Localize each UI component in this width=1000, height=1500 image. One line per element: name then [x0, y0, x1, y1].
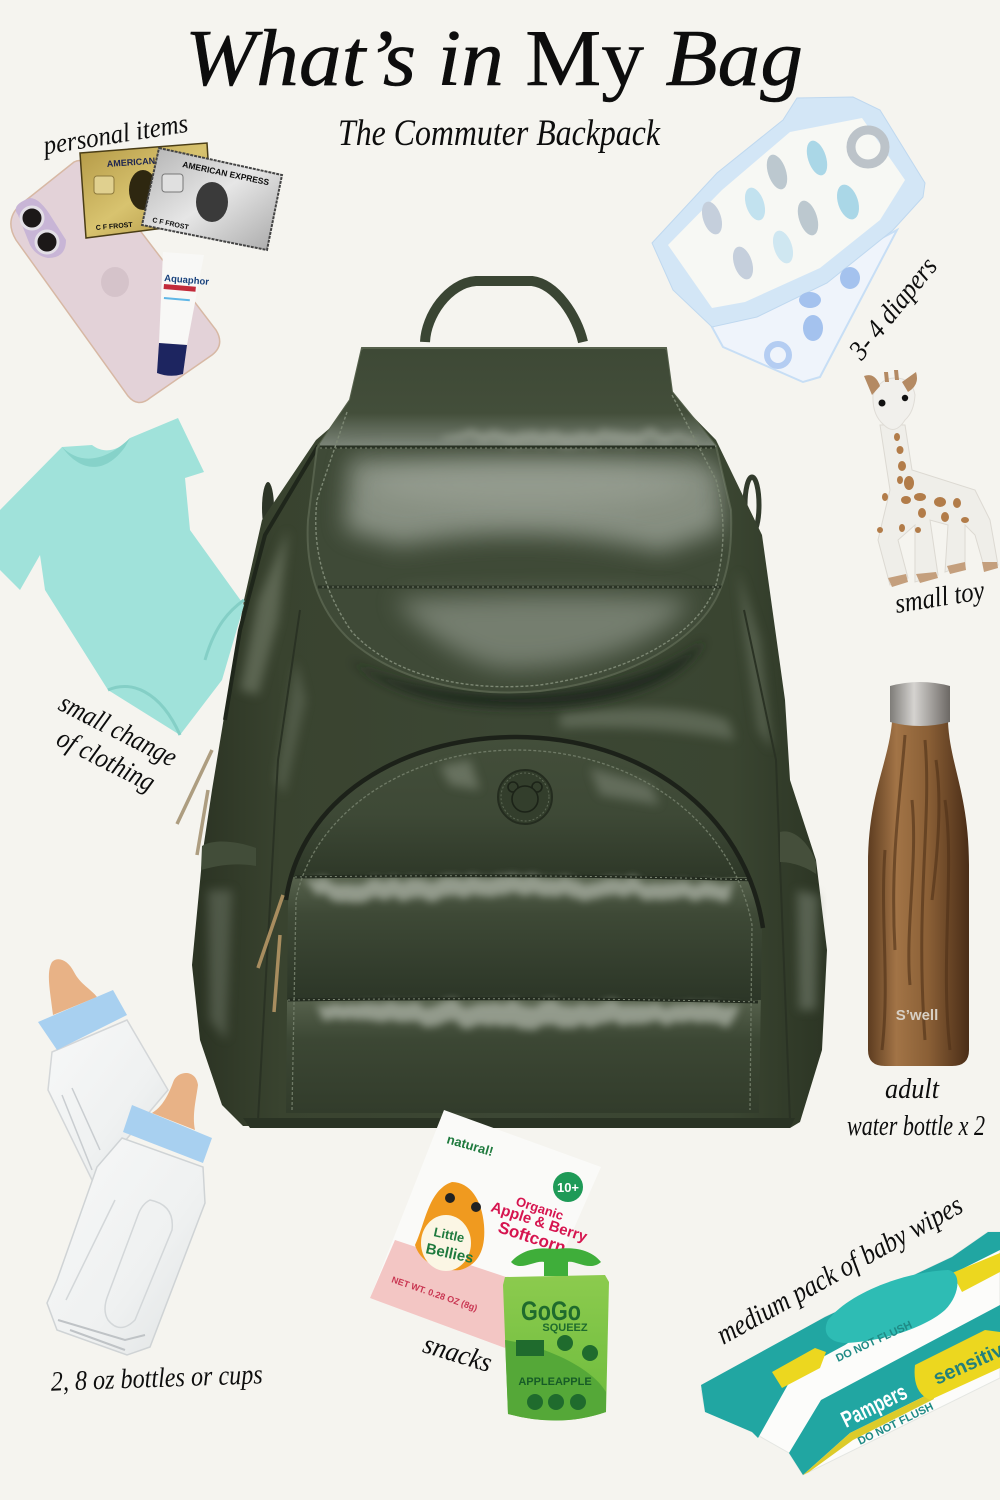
left side seam and zipper: [225, 446, 318, 720]
flap panel: [308, 348, 731, 692]
giraffe hooves: [888, 562, 998, 587]
side pocket gathers left: [201, 842, 256, 870]
toy giraffe: [864, 370, 998, 587]
flap highlights: [318, 350, 722, 668]
lower teal band: [789, 1305, 1000, 1475]
second line: of clothing: [52, 723, 160, 798]
little bellies pouch: 10+: [557, 1180, 579, 1195]
water bottle: [868, 682, 969, 1066]
yellow badges: [915, 1330, 1000, 1400]
subtitle: The Commuter Backpack: [338, 113, 660, 154]
strap ring right: [745, 477, 759, 533]
pocket arch highlights: [440, 760, 480, 790]
gold card: [80, 143, 212, 238]
baby bottles: [38, 959, 212, 1355]
bear logo patch: [498, 770, 552, 824]
title: What’s in My Bag: [185, 13, 803, 103]
silver card: AMERICAN EXPRESS: [182, 159, 270, 187]
lower prints: [767, 267, 860, 366]
label: medium pack of baby wipes: medium pack of baby wipes: [711, 1189, 968, 1351]
label: personal items: personal items: [39, 108, 190, 161]
gogo squeez pouch: GoGo: [521, 1296, 581, 1326]
zipper pull lower: [258, 895, 283, 1012]
gogo squeez pouch: APPLEAPPLE: [518, 1376, 592, 1388]
phone: [11, 161, 220, 403]
label: small toy: small toy: [893, 575, 987, 620]
label: adult water bottle x 2: [847, 1074, 985, 1142]
wood grain: [882, 735, 950, 1050]
lower diaper: [712, 230, 897, 382]
front bottle: [47, 1073, 212, 1355]
label: small change of clothing: small change: [54, 688, 182, 773]
wipes pack: [701, 1232, 1000, 1475]
flap stitching: [316, 395, 723, 687]
little bellies pouch: [370, 1110, 601, 1350]
backpack body: [192, 395, 827, 1128]
label: diapers: 3- 4 diapers: [842, 251, 944, 367]
bag bottom rim: [243, 1118, 795, 1128]
whale prints: [698, 138, 863, 282]
water bottle: S’well: [896, 1007, 938, 1024]
gold card: AMERICAN EX: [106, 155, 170, 169]
backpack illustration: [177, 281, 827, 1128]
little bellies pouch: Little: [432, 1224, 466, 1245]
giraffe head: [873, 378, 915, 429]
giraffe eyes: [878, 400, 886, 406]
yellow trim: [803, 1393, 934, 1475]
lip balm: Aquaphor: [164, 273, 210, 288]
label: 2, 8 oz bottles or cups: 2, 8 oz bottles or cups: [50, 1359, 263, 1398]
upper diaper: [652, 97, 925, 327]
snacks: [370, 1110, 609, 1421]
gogo squeez pouch: SQUEEZ: [542, 1322, 588, 1334]
side pocket gathers right: [780, 831, 816, 874]
silver card: C F FROST: [152, 217, 190, 232]
wipes: Pampers: [837, 1378, 911, 1432]
lid: [826, 1270, 957, 1343]
gold card: C F FROST: [96, 222, 134, 232]
front pocket: [280, 737, 770, 1113]
side highlights: [208, 530, 818, 1040]
shadow under flap: [350, 640, 705, 708]
pocket bands: [280, 737, 770, 877]
pocket stitching: [292, 750, 752, 1110]
little bellies pouch: NET WT. 0.28 OZ (8g): [390, 1274, 479, 1313]
body seams: [258, 610, 790, 1120]
giraffe ears and horns: [864, 370, 917, 395]
size badge: [851, 130, 885, 164]
backpack handle: [425, 281, 583, 342]
onesie: [0, 418, 244, 735]
gogo squeez pouch: [503, 1248, 609, 1421]
back bottle: [38, 959, 168, 1180]
pocket quilt highlights: [310, 879, 735, 900]
mascot: [415, 1182, 484, 1270]
lip balm: [157, 252, 210, 376]
little bellies pouch: Bellies: [424, 1240, 475, 1267]
silver card: [142, 148, 282, 250]
label: snacks: snacks: [419, 1329, 496, 1379]
pocket zipper: [286, 737, 763, 928]
label: adult water bottle x 2: adult: [885, 1074, 940, 1105]
little bellies pouch: Softcorn: [496, 1218, 568, 1257]
strap ring left: [262, 482, 274, 534]
little bellies pouch: Apple & Berry: [489, 1199, 590, 1246]
little bellies pouch: natural!: [445, 1131, 495, 1159]
wipes: [701, 1232, 1000, 1475]
little bellies pouch: Organic: [514, 1194, 565, 1223]
top teal band: [701, 1232, 1000, 1438]
personal items group: [11, 143, 282, 403]
diapers: [652, 97, 925, 382]
zipper pull upper: [177, 750, 212, 855]
giraffe body: [878, 425, 998, 585]
wipes: DO NOT FLUSH: [834, 1319, 914, 1365]
giraffe spots: [877, 433, 969, 533]
wipes: DO NOT FLUSH: [856, 1401, 936, 1448]
